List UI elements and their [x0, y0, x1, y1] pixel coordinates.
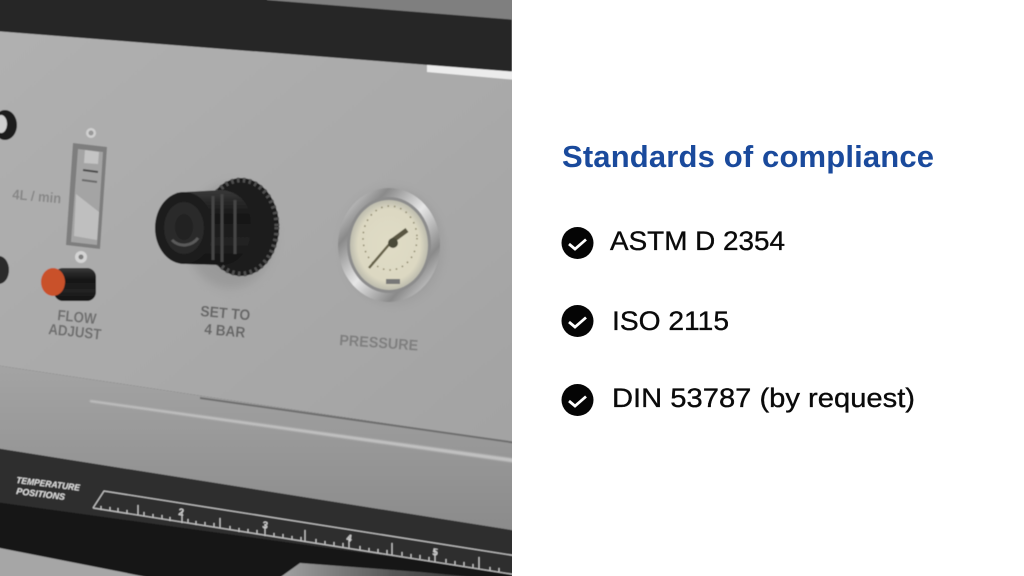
ruler numbers: 4: [346, 533, 353, 545]
pressure regulator knob: [155, 178, 279, 288]
ruler label: TEMPERATURE: [16, 475, 81, 493]
list item: ISO 2115: ISO 2115: [612, 306, 729, 336]
ruler numbers: [178, 507, 439, 559]
pressure gauge: [338, 188, 442, 303]
label: flow adjust: [48, 310, 102, 340]
list item: ASTM D 2354: [562, 226, 785, 259]
left edge knobs: [0, 110, 17, 284]
list item: ISO 2115: [562, 305, 729, 337]
flow adjust knob: [41, 268, 96, 301]
list item: ASTM D 2354: ASTM D 2354: [610, 226, 785, 256]
stainless steel panel: [0, 31, 517, 443]
list item: DIN 53787 (by request): DIN 53787 (by request): [612, 383, 915, 413]
ruler label: [16, 475, 81, 502]
icon: check: [562, 227, 594, 259]
label: set to 4 bar: [200, 306, 250, 338]
label: set to 4 bar: SET TO: [200, 303, 251, 324]
label: flow adjust: ADJUST: [48, 321, 102, 344]
upper grey machine edge: [267, 0, 517, 20]
label: pressure: PRESSURE: [339, 332, 419, 355]
flow meter window: [66, 128, 107, 263]
panel top highlight: [427, 65, 517, 80]
ruler numbers: 2: [178, 507, 185, 519]
icon: check: [562, 384, 594, 416]
photo: instrument panel: [0, 0, 517, 576]
heading: Standards of compliance: [562, 139, 934, 174]
lower metal band: [0, 365, 517, 531]
label: flow adjust: FLOW: [57, 307, 98, 328]
ruler numbers: 3: [262, 520, 269, 532]
label: set to 4 bar: 4 BAR: [204, 321, 246, 342]
label: 4L / min: 4L / min: [12, 186, 62, 206]
black ruler strip: [19, 476, 512, 574]
icon: check: [562, 305, 594, 337]
ruler numbers: 5: [432, 547, 439, 559]
ruler scale: [93, 491, 517, 575]
ruler label: POSITIONS: [16, 486, 66, 502]
